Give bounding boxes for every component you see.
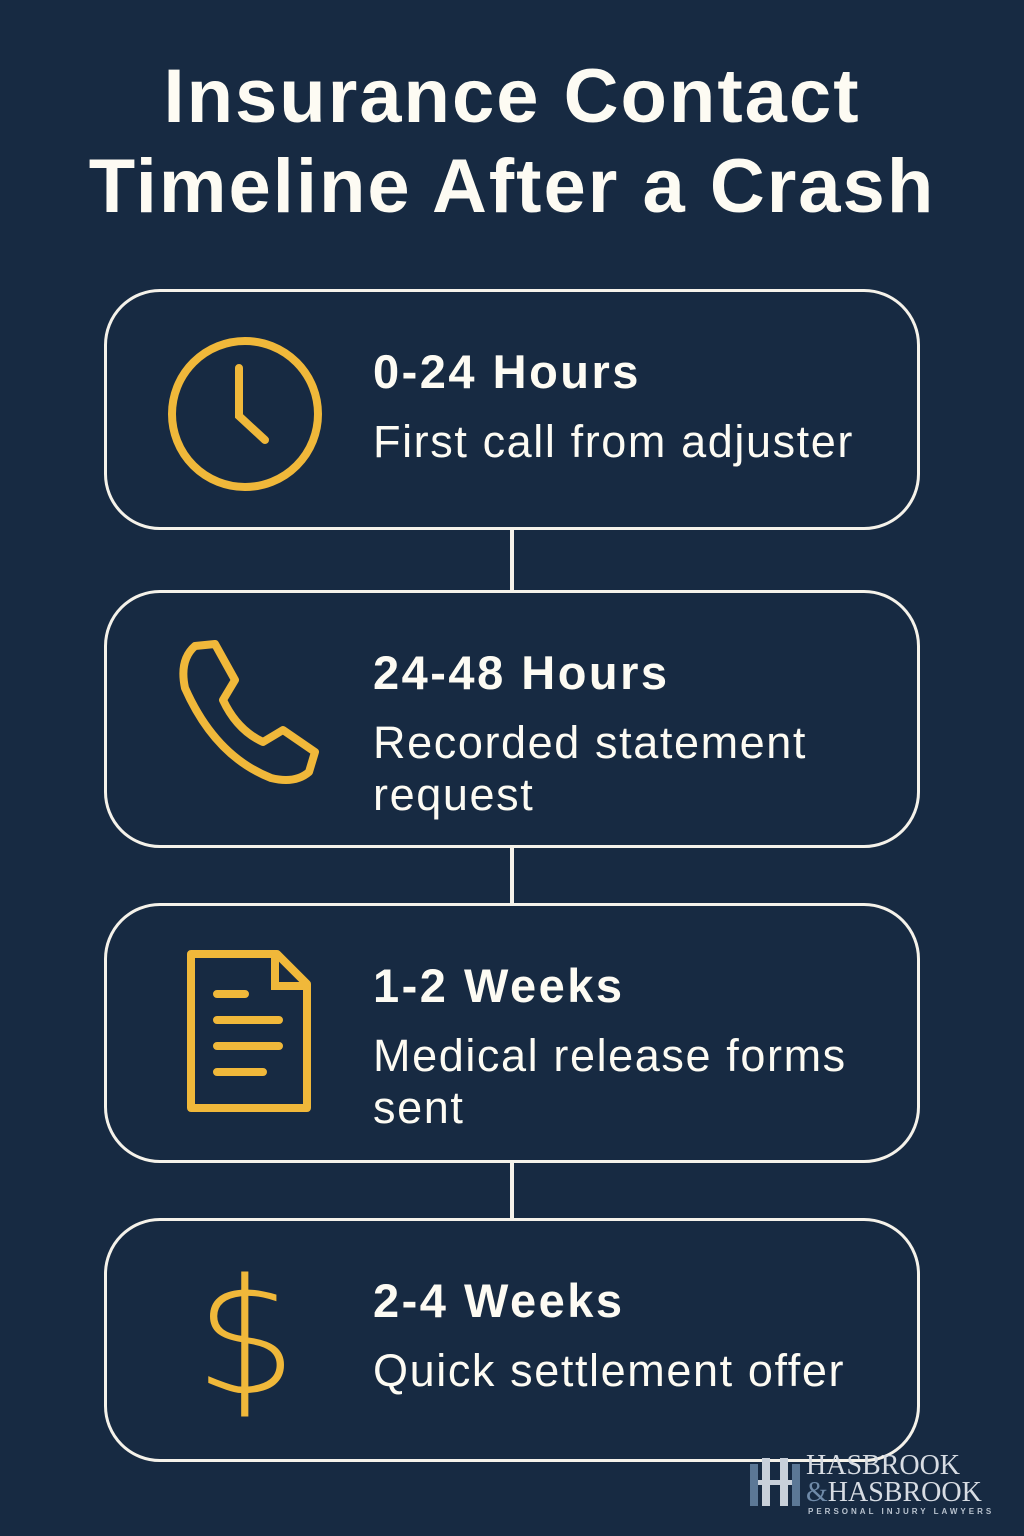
text: Quick settlement offer	[373, 1345, 845, 1396]
connector 2	[510, 847, 514, 903]
icon: document	[187, 950, 311, 1112]
panel: 1-2 weeks	[104, 903, 920, 1163]
icon: phone	[179, 640, 320, 784]
icon: dollar: $	[195, 1244, 297, 1431]
text: First call from adjuster	[373, 416, 854, 467]
logo	[750, 1450, 994, 1516]
logo: PERSONAL INJURY LAWYERS	[808, 1507, 994, 1516]
heading: 0-24 Hours	[373, 345, 641, 398]
logo text	[806, 1450, 982, 1508]
icon: clock	[168, 337, 322, 491]
connector 3	[510, 1162, 514, 1218]
connector 1	[510, 529, 514, 590]
logo mark	[750, 1458, 800, 1506]
text: Medical release forms sent	[373, 1030, 847, 1133]
heading: 2-4 Weeks	[373, 1274, 625, 1327]
logo text: &HASBROOK	[806, 1477, 982, 1508]
heading: 1-2 Weeks	[373, 959, 625, 1012]
panel: 24-48 hours	[104, 590, 920, 848]
title: Insurance Contact	[163, 54, 861, 139]
heading: 24-48 Hours	[373, 646, 670, 699]
title: Timeline After a Crash	[89, 144, 935, 229]
text: Recorded statement request	[373, 717, 807, 820]
panel: 0-24 hours	[104, 289, 920, 530]
panel: 2-4 weeks	[104, 1218, 920, 1462]
title	[89, 54, 935, 229]
logo text: HASBROOK	[806, 1450, 960, 1481]
